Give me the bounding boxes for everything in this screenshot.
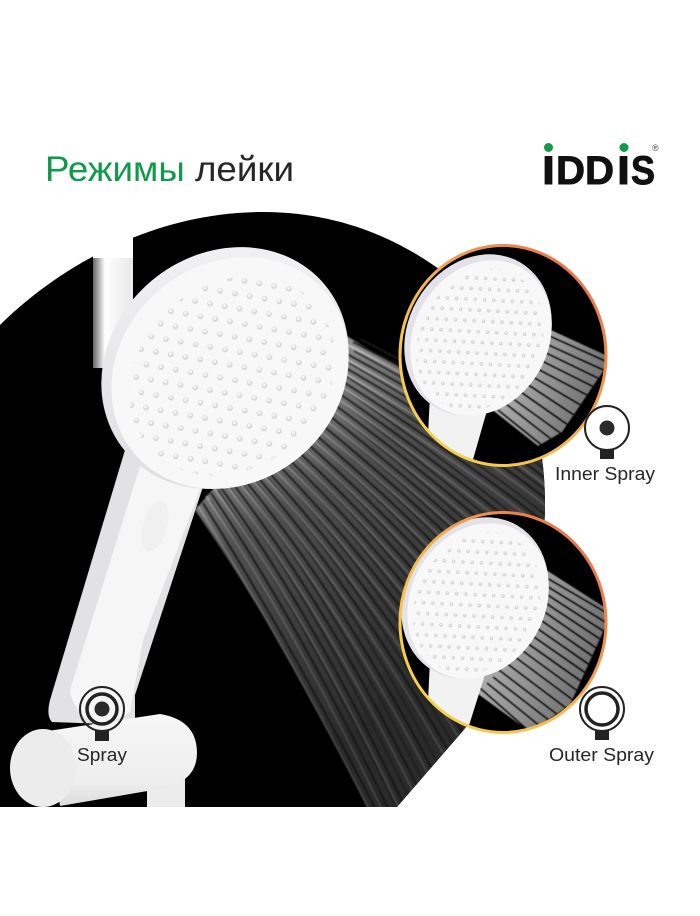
water spray — [195, 335, 558, 811]
upper pole — [93, 228, 133, 368]
label: Outer Spray: Outer Spray — [549, 744, 655, 765]
logo: IDDIS: S — [631, 149, 655, 193]
inset handle — [428, 403, 486, 460]
inset water jets — [478, 570, 604, 728]
logo: IDDIS: D — [556, 149, 585, 193]
inset ring — [400, 246, 606, 466]
logo: IDDIS: ® — [652, 143, 659, 153]
nozzles — [129, 278, 334, 476]
icon: inner spray mode — [585, 406, 629, 459]
icon: outer spray mode — [580, 687, 624, 740]
inset head — [402, 517, 549, 678]
handle — [48, 440, 215, 728]
logo: IDDIS: I — [542, 149, 555, 193]
label: Inner Spray: Inner Spray — [555, 463, 656, 484]
inset head — [404, 254, 552, 416]
logo: IDDIS: D — [585, 149, 614, 193]
logo: IDDIS: I — [617, 149, 630, 193]
bracket cylinder — [10, 714, 197, 807]
inset ring — [400, 512, 606, 732]
main photo: shower on black background — [0, 212, 545, 807]
lower pole — [147, 770, 185, 807]
inset: inner spray mode — [398, 244, 608, 467]
shower head — [101, 247, 349, 489]
inset water jets — [493, 330, 604, 446]
label: Spray: Spray — [77, 744, 128, 765]
black background shape — [0, 212, 545, 807]
logo: IDDIS — [542, 143, 659, 193]
inset: outer spray mode — [398, 511, 608, 734]
inset handle — [428, 668, 484, 725]
title: Режимы лейки — [45, 150, 294, 189]
icon: spray mode — [80, 687, 124, 741]
